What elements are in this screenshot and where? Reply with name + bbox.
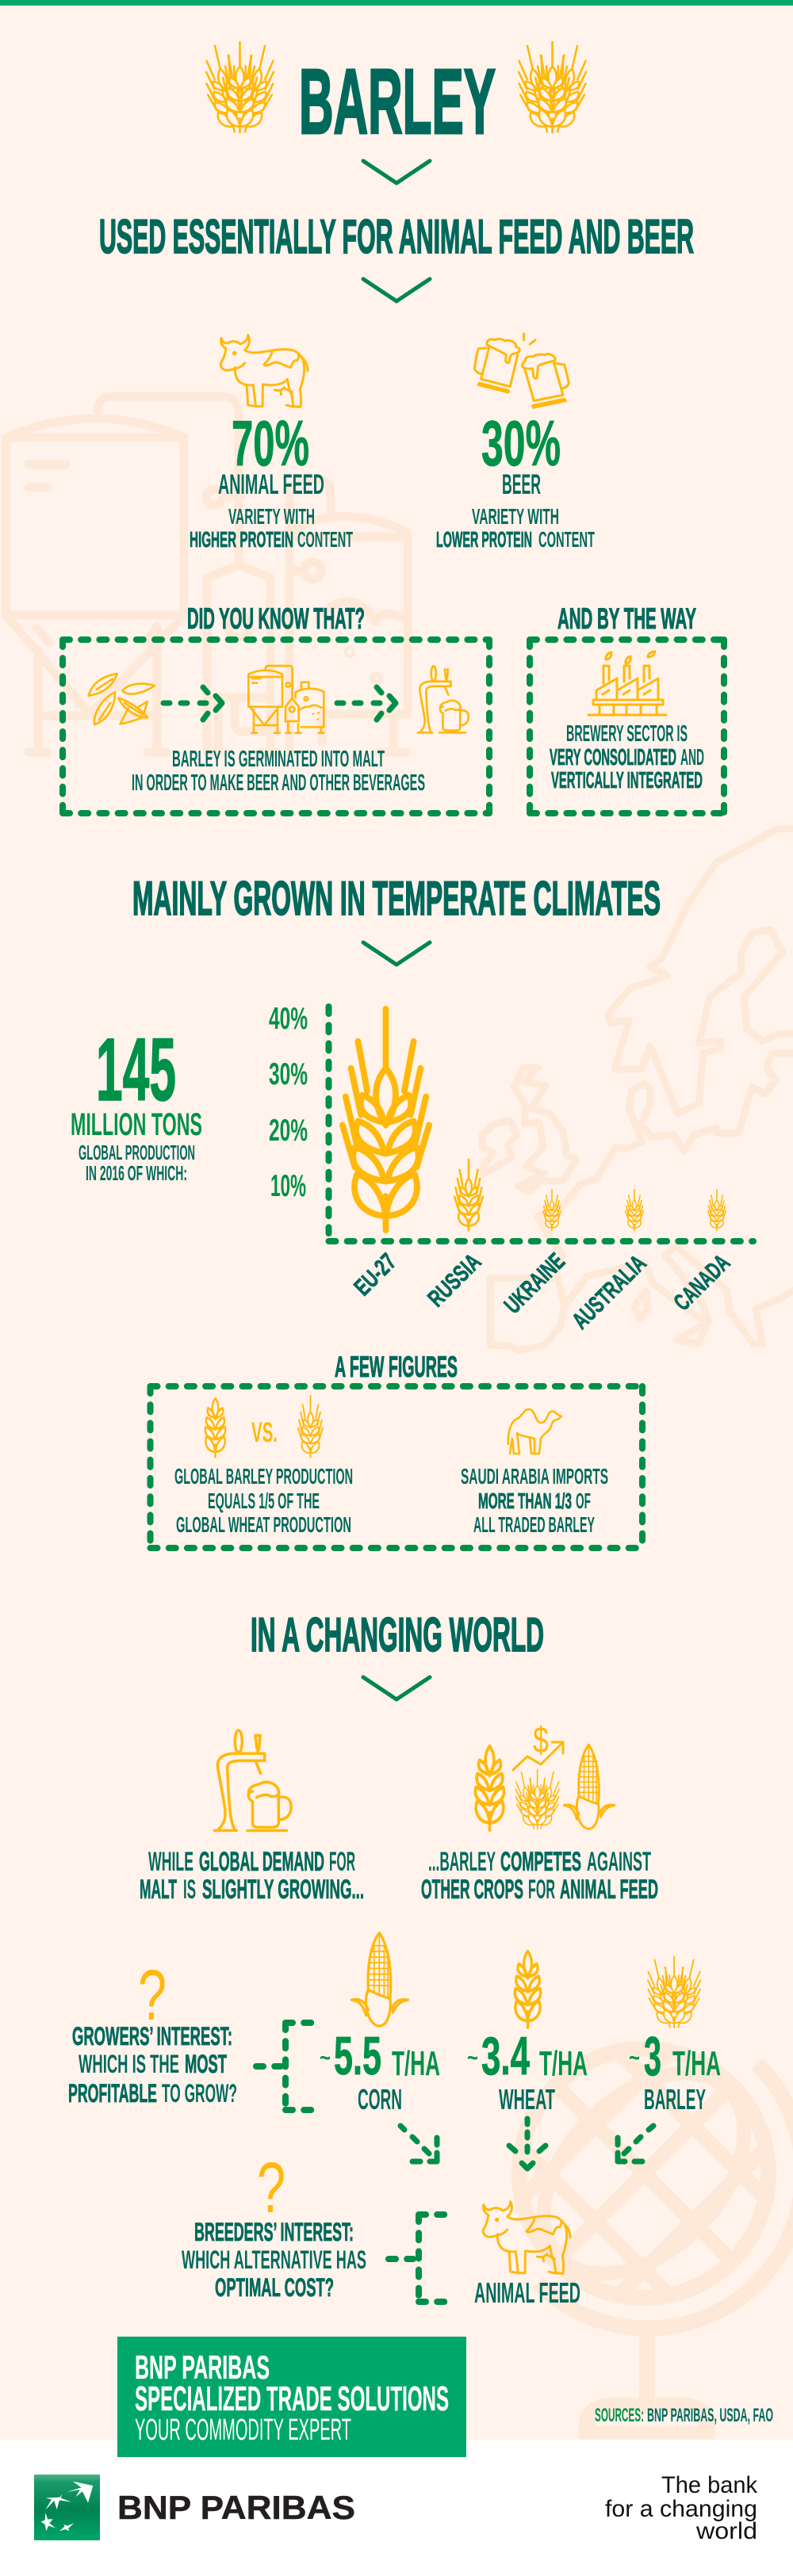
text: global production in 2016: IN 2016 OF WHICH: (86, 1161, 187, 1185)
panel: brewery sector: AND (680, 745, 704, 770)
arrow: corn to feed (400, 2126, 437, 2161)
heading: a few figures: A FEW FIGURES (335, 1351, 458, 1383)
arrow: grains to brewery (163, 687, 222, 720)
y axis labels: 40% (269, 1002, 308, 1036)
text: growers question: TO GROW? (162, 2079, 237, 2108)
footer white band (0, 2440, 793, 2576)
chevron arrow (363, 279, 430, 301)
text: brewery sector consolidated (550, 721, 704, 793)
background: europe map (481, 829, 793, 1351)
text: production comparison: EQUALS 1/5 OF THE (208, 1489, 320, 1513)
panel: a few figures (151, 1386, 642, 1548)
icon: dollar sign: $ (533, 1719, 549, 1760)
text: variety with higher protein: HIGHER PROTEIN (190, 527, 293, 552)
bar: Ukraine (543, 1190, 561, 1231)
x axis labels: CANADA (669, 1250, 735, 1316)
text: production comparison: GLOBAL WHEAT PRODUCTION (176, 1512, 351, 1537)
dashed box (63, 640, 489, 813)
label: barley: BARLEY (644, 2083, 706, 2115)
dashed box (530, 640, 724, 813)
bar: Canada (708, 1190, 726, 1231)
text: growers question (68, 2022, 237, 2108)
tagline: for a changing (605, 2496, 757, 2522)
panel: BNP Paribas banner (117, 2337, 466, 2457)
tagline: The bank (661, 2472, 758, 2498)
text: growers question: MOST (185, 2050, 227, 2078)
text: demand for malt: SLIGHTLY GROWING... (202, 1875, 364, 1905)
text: saudi arabia imports (461, 1464, 608, 1537)
icon: wheat (475, 1746, 504, 1830)
panel: malt process: IN ORDER TO MAKE BEER AND OTHER BEVERAGES (132, 770, 425, 796)
text: breeders question: OPTIMAL COST? (215, 2273, 334, 2302)
banner background (117, 2337, 466, 2457)
icon: corn (352, 1933, 408, 2026)
label: animal feed: ANIMAL FEED (218, 469, 324, 500)
icon: camel (508, 1409, 561, 1454)
icon: barley grains (89, 674, 155, 724)
stat: barley yield: ~ (629, 2045, 640, 2071)
text: demand for malt: GLOBAL DEMAND (199, 1847, 324, 1877)
text: global production in 2016 (79, 1141, 195, 1185)
heading: in a changing world: IN A CHANGING WORLD (251, 1608, 544, 1661)
arrow: brewery to beer (337, 687, 396, 720)
panel: beer share (436, 334, 595, 552)
icon: wheat ear (205, 1398, 225, 1457)
chart: barley production by country (269, 1002, 753, 1334)
stat: corn yield: T/HA (392, 2044, 440, 2083)
text: breeders question: BREEDERS’ INTEREST: (194, 2218, 354, 2246)
text: brewery sector consolidated: VERY CONSOLIDATED (550, 745, 676, 770)
stat: corn yield (320, 2026, 440, 2086)
banner line 1: BNP PARIBAS (135, 2349, 270, 2386)
text: barley competes: ANIMAL FEED (560, 1875, 658, 1905)
label: corn: CORN (358, 2083, 402, 2115)
text: breeders question (182, 2218, 366, 2302)
stat: wheat yield (467, 2026, 588, 2086)
text: barley competes: AGAINST (587, 1847, 651, 1877)
bar: Australia (626, 1190, 643, 1231)
sources: SOURCES: (595, 2405, 644, 2426)
panel: wheat (467, 1951, 588, 2115)
x axis labels: AUSTRALIA (567, 1250, 651, 1334)
icon: beer tap large (215, 1730, 291, 1830)
panel: malt process (63, 640, 489, 813)
panel: corn (320, 1933, 440, 2115)
text: saudi arabia imports: MORE THAN 1/3 (478, 1489, 572, 1513)
tagline: world (695, 2518, 757, 2544)
top bar (0, 0, 793, 6)
label: wheat: WHEAT (499, 2083, 555, 2115)
stat: barley yield: T/HA (672, 2044, 721, 2083)
icon: beer tap small (418, 666, 469, 732)
text: variety with lower protein: CONTENT (538, 527, 595, 552)
icon: corn (564, 1745, 615, 1829)
x axis labels: EU-27 (349, 1248, 401, 1301)
panel: growers interest (68, 1956, 319, 2112)
background: globe (511, 2041, 793, 2440)
text: global production in 2016: GLOBAL PRODUCTION (79, 1141, 195, 1164)
x axis labels: RUSSIA (423, 1248, 486, 1312)
text: demand for malt: IS (183, 1875, 196, 1905)
logo: BNP Paribas mark (34, 2475, 100, 2540)
chevron arrow (363, 1677, 430, 1699)
icon: competing crops (475, 1719, 615, 1831)
text: breeders question: WHICH ALTERNATIVE HAS (182, 2245, 366, 2274)
banner line 2: SPECIALIZED TRADE SOLUTIONS (135, 2379, 449, 2418)
text: production comparison (174, 1464, 353, 1537)
stat: wheat yield: 3.4 (481, 2026, 530, 2086)
text: saudi arabia imports: SAUDI ARABIA IMPORTS (461, 1464, 608, 1489)
x axis labels: UKRAINE (500, 1248, 570, 1319)
icon: factory (588, 652, 666, 715)
icon: brewery (248, 666, 324, 733)
text: variety with higher protein: VARIETY WITH (228, 504, 315, 529)
icon: barley (510, 1769, 565, 1831)
background: brewery tanks (6, 396, 408, 753)
text: barley competes: ...BARLEY (428, 1847, 496, 1877)
icon: wheat (515, 1951, 541, 2028)
stat: barley yield: 3 (644, 2025, 661, 2087)
stat: corn yield: ~ (320, 2045, 331, 2071)
text: variety with higher protein: CONTENT (297, 527, 353, 552)
icon: barley bundle left (197, 42, 282, 136)
icon: barley ear (298, 1396, 323, 1457)
stat: 70%: 70% (232, 408, 309, 480)
logo: wordmark: BNP PARIBAS (117, 2489, 355, 2526)
heading: did you know that: DID YOU KNOW THAT? (187, 602, 365, 635)
text: germination: BARLEY IS GERMINATED INTO MALT (172, 747, 385, 772)
text: demand for malt (140, 1847, 364, 1905)
text: demand for malt: MALT (140, 1875, 177, 1905)
stat: wheat yield: ~ (467, 2045, 478, 2071)
text: demand for malt: WHILE (148, 1847, 193, 1877)
arrow: wheat to feed (509, 2119, 546, 2169)
text: barley competes: OTHER CROPS (421, 1875, 523, 1905)
panel: brewery sector (530, 640, 724, 813)
icon: cow (220, 335, 308, 407)
tagline (605, 2472, 758, 2544)
stat: 30%: 30% (481, 408, 561, 480)
icon: cow (483, 2202, 570, 2273)
text: variety with higher protein (190, 504, 353, 552)
icon: question mark: ? (138, 1956, 167, 2035)
stat: wheat yield: T/HA (539, 2044, 588, 2083)
chevron arrow (363, 942, 430, 965)
text: growers question: PROFITABLE (68, 2079, 157, 2108)
text: saudi arabia imports: ALL TRADED BARLEY (473, 1512, 595, 1537)
bar: EU-27 (343, 1009, 429, 1230)
label: beer: BEER (502, 469, 541, 500)
text: barley competes: FOR (528, 1875, 555, 1905)
label: vs: VS. (251, 1417, 278, 1448)
text: production comparison: GLOBAL BARLEY PRODUCTION (174, 1464, 353, 1489)
header: barley title with wheat icons (197, 42, 595, 153)
axes (328, 1007, 753, 1241)
stat: barley yield (629, 2025, 721, 2087)
text: barley competes: COMPETES (500, 1847, 581, 1877)
sources (595, 2405, 773, 2426)
label: animal feed: ANIMAL FEED (474, 2276, 580, 2309)
y axis labels: 10% (270, 1169, 306, 1203)
number: 145: 145 (96, 1020, 176, 1119)
x axis labels (349, 1248, 735, 1334)
dashed box (151, 1386, 642, 1548)
text: growers question: GROWERS’ INTEREST: (72, 2022, 232, 2050)
chevron arrow (363, 161, 430, 183)
text: saudi arabia imports: OF (576, 1489, 591, 1513)
icon: beer mugs (474, 334, 569, 407)
icon: barley bundle right (510, 42, 595, 136)
panel: barley (629, 1957, 721, 2115)
text: germination (132, 747, 425, 796)
dashed bracket (256, 2023, 319, 2112)
arrow: barley to feed (618, 2126, 653, 2161)
y axis labels: 30% (269, 1057, 308, 1091)
icon: barley (641, 1957, 707, 2030)
label: million tons: MILLION TONS (71, 1107, 202, 1142)
text: variety with lower protein (436, 504, 595, 552)
icon: price arrow (513, 1742, 563, 1770)
bar: Russia (454, 1160, 483, 1230)
text: demand for malt: FOR (329, 1847, 355, 1877)
text: growers question: WHICH IS THE (79, 2050, 179, 2078)
stat: corn yield: 5.5 (334, 2026, 381, 2086)
banner line 3: YOUR COMMODITY EXPERT (135, 2414, 351, 2447)
y axis labels (269, 1002, 308, 1203)
text: variety with lower protein: VARIETY WITH (472, 504, 559, 529)
text: variety with lower protein: LOWER PROTEIN (436, 527, 532, 552)
title: BARLEY (299, 50, 496, 153)
panel: breeders interest (182, 2149, 580, 2309)
panel: animal feed share (190, 335, 353, 552)
y axis labels: 20% (269, 1114, 308, 1148)
dashed bracket (389, 2215, 452, 2304)
stat: global production (71, 1020, 202, 1185)
icon: question mark: ? (257, 2149, 285, 2228)
text: barley competes (421, 1847, 658, 1905)
